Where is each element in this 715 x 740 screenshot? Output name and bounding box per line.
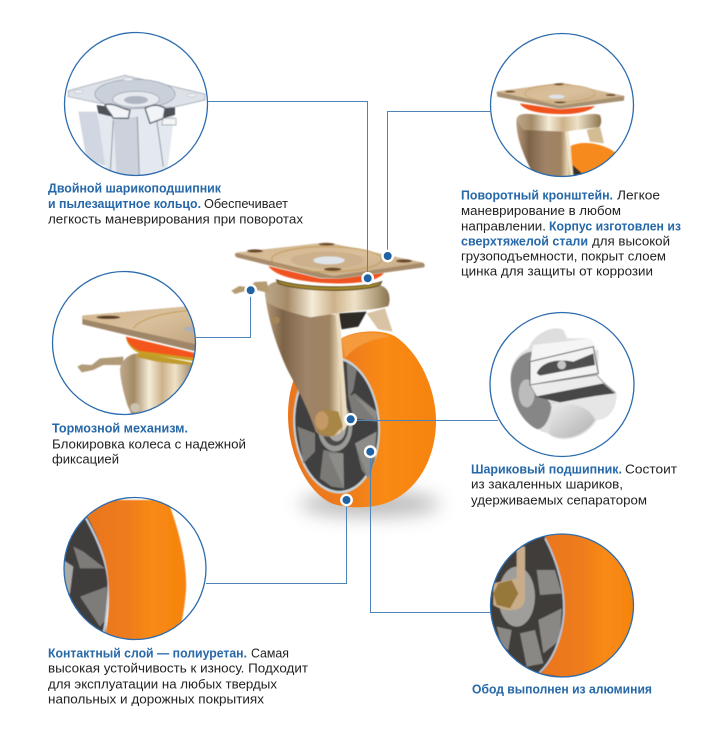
text: ball bearing: удерживаемых сепаратором xyxy=(471,492,647,508)
marker dots xyxy=(246,251,393,505)
text: brake: Блокировка колеса с надежной xyxy=(52,436,246,452)
detail circle: bearing cutaway xyxy=(64,32,208,177)
text: rim: Обод выполнен из алюминия xyxy=(472,682,652,696)
text: bracket: цинка для защиты от коррозии xyxy=(461,264,653,278)
text: polyurethane xyxy=(48,646,308,706)
text: ball bearing: из закаленных шариков, xyxy=(471,476,623,492)
text: polyurethane: Контактный слой — полиуретан. xyxy=(48,646,247,660)
text: ball bearing: Шариковый подшипник. xyxy=(471,462,622,476)
text: bracket xyxy=(461,188,682,278)
tread highlight xyxy=(342,332,390,358)
central caster wheel xyxy=(231,242,440,517)
panel: swivel bracket xyxy=(461,34,682,278)
text: ball bearing xyxy=(471,462,677,508)
gold bearing ring xyxy=(277,280,382,290)
text: double bearing xyxy=(48,180,304,226)
detail circle: bracket xyxy=(490,34,634,180)
fork inner shadow xyxy=(338,312,367,329)
detail circle: brake xyxy=(52,272,197,418)
text: polyurethane: для эксплуатации на любых твердых xyxy=(48,676,277,692)
text: bracket: грузоподъемности, покрыт слоем xyxy=(461,248,666,264)
panel: double ball bearing xyxy=(48,32,304,226)
text: bracket: Поворотный кронштейн. xyxy=(461,188,613,202)
mounting plate xyxy=(235,242,425,279)
text: ball bearing: Состоит xyxy=(625,462,677,476)
aluminium hub xyxy=(289,353,385,497)
panel: ball bearing xyxy=(471,312,677,508)
text: brake: Тормозной механизм. xyxy=(52,420,188,436)
detail circle: cutaway bearing xyxy=(490,312,634,456)
text: bracket: направлении. xyxy=(461,218,546,234)
orange polyurethane tread xyxy=(288,331,436,507)
detail circle: tread xyxy=(60,498,206,647)
text: polyurethane: Самая xyxy=(251,646,289,660)
text: bracket: Легкое xyxy=(617,188,660,202)
panel: polyurethane contact layer xyxy=(48,498,308,706)
leader lines xyxy=(196,102,498,612)
text: double bearing: Двойной шарикоподшипник xyxy=(48,180,221,196)
brake pin xyxy=(272,316,280,324)
text: double bearing: Обеспечивает xyxy=(204,196,288,211)
text: bracket: сверхтяжелой стали xyxy=(461,234,588,248)
text: brake: фиксацией xyxy=(52,452,119,466)
rear fork arm xyxy=(367,308,393,332)
floor shadow xyxy=(300,491,440,517)
text: double bearing: и пылезащитное кольцо. xyxy=(48,196,201,211)
orange seal ring xyxy=(268,266,384,283)
brake lever xyxy=(231,281,270,294)
text: bracket: для высокой xyxy=(592,234,670,248)
text: double bearing: легкость маневрирования при поворотах xyxy=(48,212,304,226)
text: bracket: маневрирование в любом xyxy=(461,203,621,218)
axle bolt xyxy=(315,409,343,436)
text: polyurethane: напольных и дорожных покрытиях xyxy=(48,692,265,706)
swivel fork xyxy=(265,282,390,437)
text: polyurethane: высокая устойчивость к износу. Подходит xyxy=(48,660,308,676)
text: brake xyxy=(52,420,246,466)
panel: aluminium rim xyxy=(472,530,652,696)
panel: brake mechanism xyxy=(52,272,246,466)
text: bracket: Корпус изготовлен из xyxy=(549,218,682,234)
detail circle: rim xyxy=(487,530,640,680)
